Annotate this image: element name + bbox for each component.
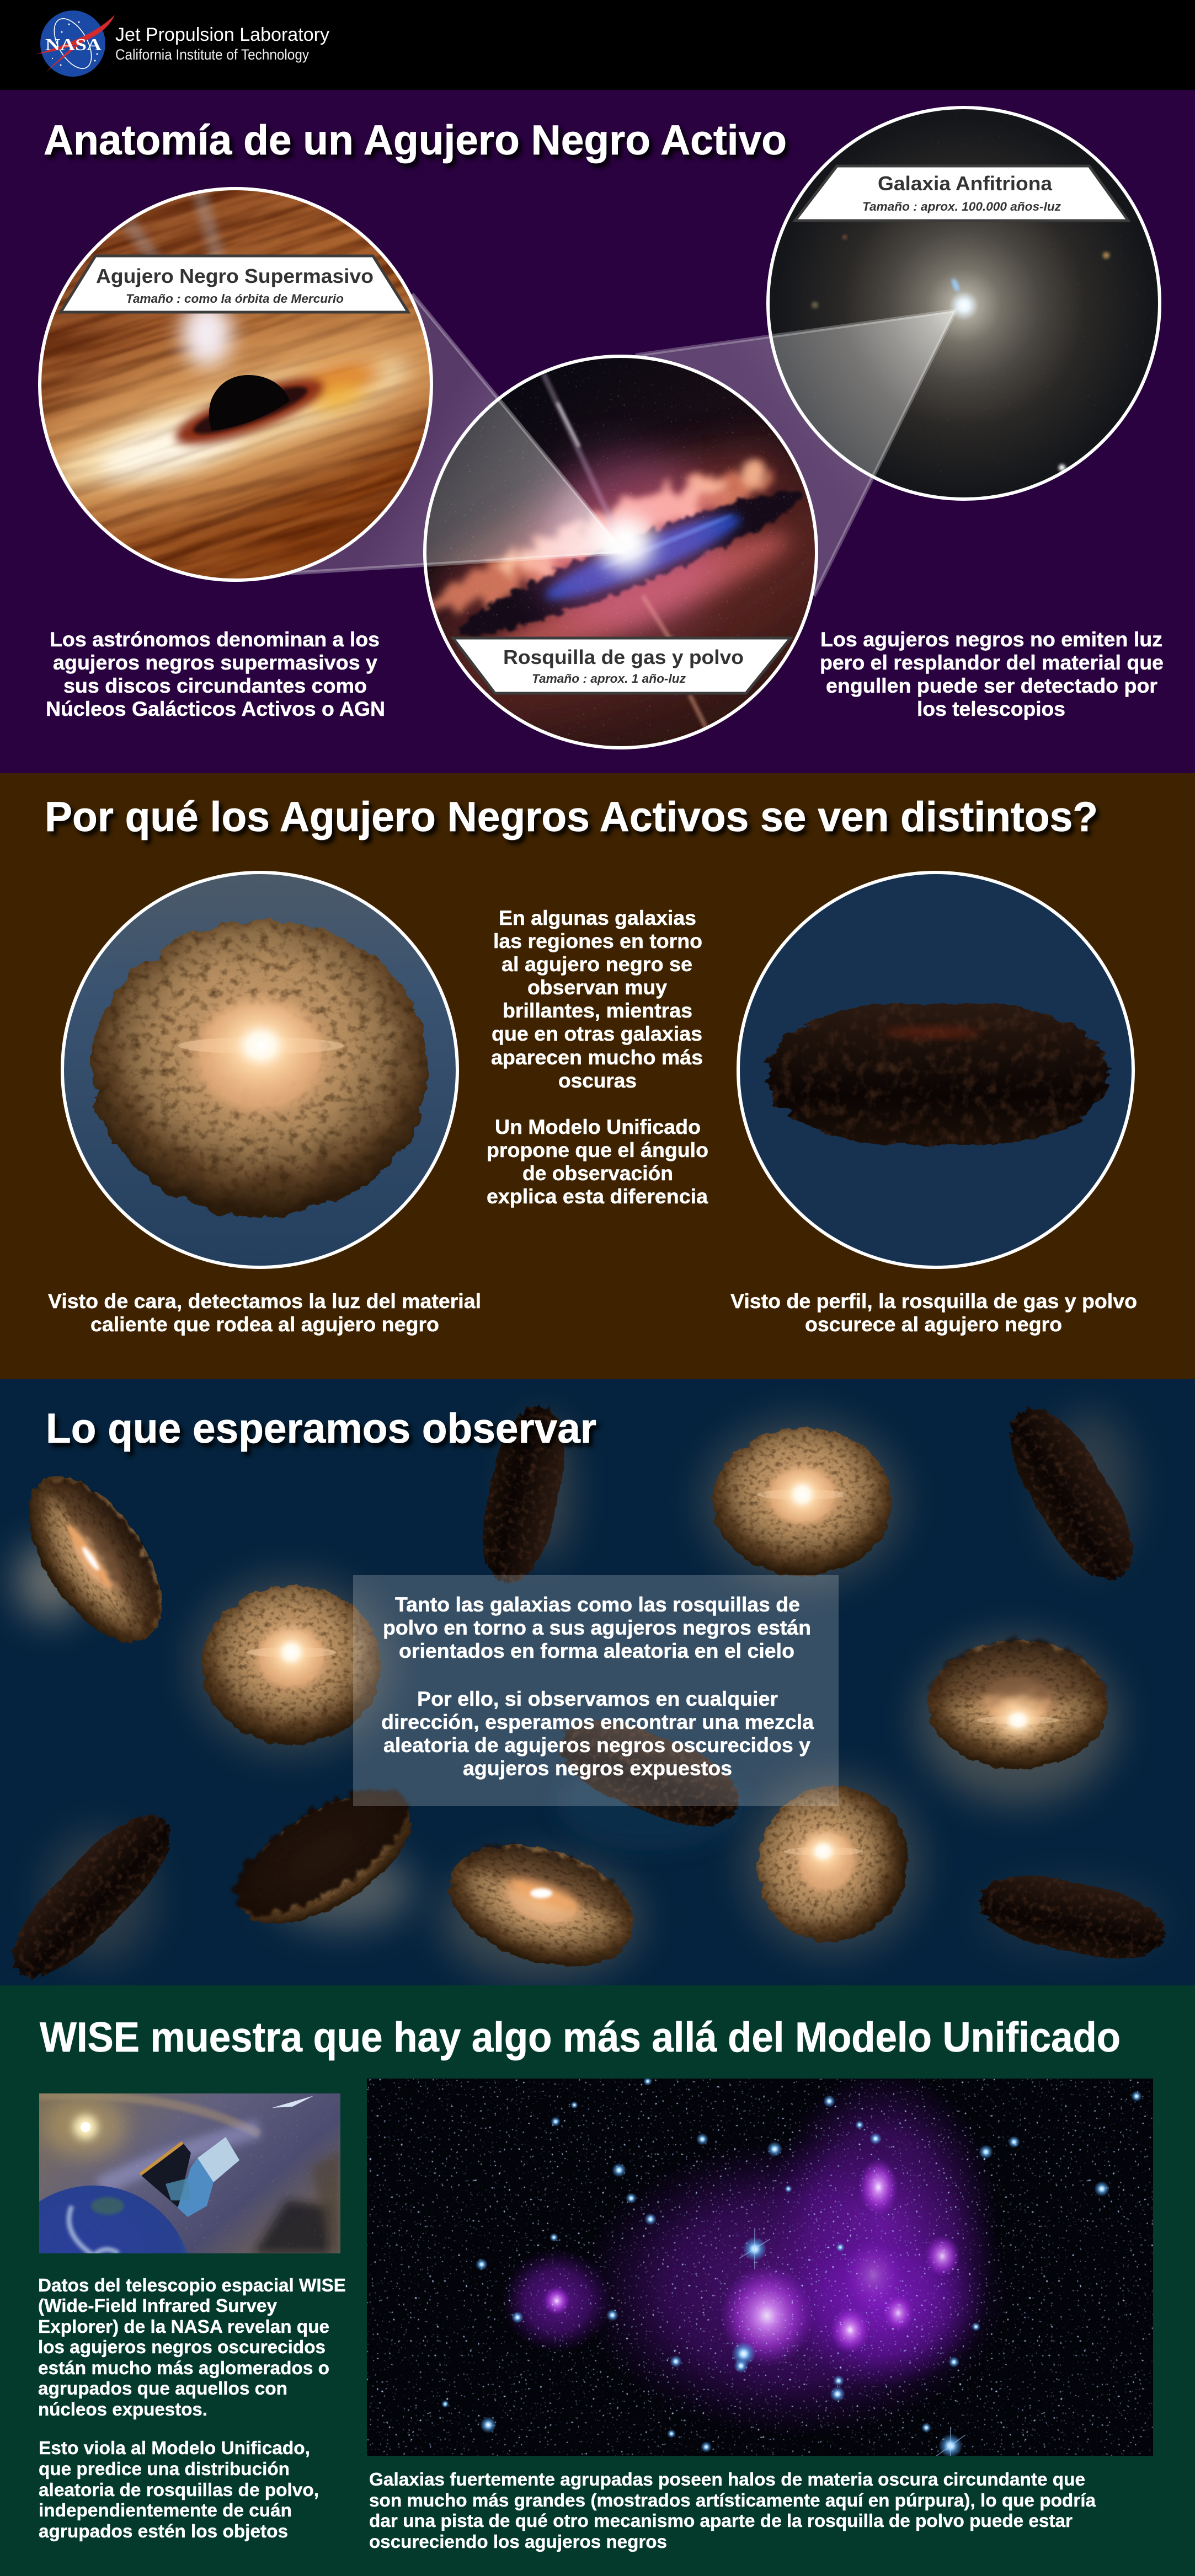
- label: dust donut: Tamaño : aprox. 1 año-luz: [532, 672, 686, 685]
- arrow: zoom cone from dust donut to black hole: [236, 294, 625, 574]
- callout: random orientation: Por ello, si observamos en cualquier: [417, 1688, 778, 1710]
- panel: header: [0, 0, 1195, 90]
- text block: WISE data: los agujeros negros oscurecidos: [38, 2337, 326, 2357]
- callout: random orientation: orientados en forma aleatoria en el cielo: [399, 1640, 794, 1662]
- callout: random orientation: Tanto las galaxias como las rosquillas de: [395, 1593, 800, 1616]
- text block: unified model: al agujero negro se: [502, 953, 692, 976]
- heading: WISE: WISE muestra que hay algo más allá del Modelo Unificado: [40, 2014, 1121, 2061]
- panel: WISE shows something beyond the unified model: [0, 1985, 1195, 2576]
- bright blue stars: [441, 2077, 1142, 2458]
- label: supermassive black hole: Tamaño : como la órbita de Mercurio: [126, 292, 344, 306]
- callout: random orientation: aleatoria de agujeros negros oscurecidos y: [383, 1734, 810, 1756]
- halos: dark matter in purple: [502, 2068, 1010, 2438]
- donut: dark with bright lower rim, bottom left centre: [215, 1765, 434, 1951]
- text block: WISE data: Explorer) de la NASA revelan que: [38, 2316, 329, 2337]
- text block: unified model: propone que el ángulo: [487, 1139, 708, 1161]
- label: host galaxy: Tamaño : aprox. 100.000 años-luz: [862, 200, 1061, 213]
- arrow: zoom cone from host galaxy to dust donut: [621, 310, 956, 596]
- image: galaxy cluster starfield: [367, 2068, 1153, 2458]
- text block: unified model: aparecen mucho más: [491, 1046, 703, 1069]
- panel: anatomy of an active black hole: [0, 32, 1195, 787]
- callout: random orientation: agujeros negros expuestos: [463, 1757, 732, 1780]
- text block: WISE data: agrupados estén los objetos: [39, 2521, 288, 2541]
- donut: face-on, top centre right: [703, 1419, 901, 1584]
- label: host galaxy: Galaxia Anfitriona: [878, 172, 1053, 195]
- caption: edge-on view: Visto de perfil, la rosquilla de gas y polvo: [730, 1290, 1137, 1313]
- image circle: host galaxy: [767, 105, 1161, 502]
- label: supermassive black hole: Agujero Negro Supermasivo: [96, 265, 374, 287]
- donut: tilted with slit, top left: [2, 1454, 188, 1664]
- donut: dark edge-on, bottom right: [974, 1864, 1171, 1970]
- text block: AGN definition: [46, 628, 385, 720]
- text block: black holes emit no light: pero el resplandor del material que: [820, 651, 1164, 674]
- text block: AGN definition: Los astrónomos denominan a los: [50, 628, 380, 651]
- text block: unified model: Un Modelo Unificado: [495, 1116, 701, 1138]
- heading: why different: Por qué los Agujero Negros Activos se ven distintos?: [45, 794, 1098, 840]
- text block: unified model: de observación: [522, 1162, 673, 1185]
- callout: random orientation: [353, 1575, 839, 1806]
- label: dust donut: Rosquilla de gas y polvo: [503, 646, 744, 668]
- donut: dark edge-on, bottom left: [0, 1797, 189, 1995]
- donut: face-on, right middle: [919, 1638, 1117, 1803]
- text block: unified model: brillantes, mientras: [503, 999, 692, 1022]
- panel: what we expect to observe: [0, 1379, 1195, 1995]
- image circle: face-on donut: [62, 872, 457, 1267]
- text block: AGN definition: Núcleos Galácticos Activos o AGN: [46, 698, 385, 720]
- text block: WISE data: Esto viola al Modelo Unificado,: [39, 2438, 310, 2458]
- text block: WISE data: núcleos expuestos.: [38, 2399, 207, 2419]
- donut: tilted, bottom centre: [434, 1823, 649, 1988]
- text block: unified model: oscuras: [558, 1069, 637, 1092]
- text block: black holes emit no light: los telescopios: [917, 698, 1065, 720]
- label: supermassive black hole: [61, 256, 408, 312]
- text block: WISE data: agrupados que aquellos con: [38, 2378, 287, 2398]
- text block: unified model: las regiones en torno: [493, 930, 702, 952]
- caption: dark matter halos: Galaxias fuertemente agrupadas poseen halos de materia oscura circundante que: [369, 2469, 1085, 2489]
- image: WISE telescope: [0, 2093, 340, 2384]
- donut: dark edge-on, top right: [991, 1393, 1152, 1595]
- text block: black holes emit no light: [820, 628, 1164, 720]
- heading: anatomy: Anatomía de un Agujero Negro Activo: [44, 117, 787, 164]
- image circle: supermassive black hole: [38, 187, 433, 582]
- caption: face-on view: Visto de cara, detectamos la luz del material: [48, 1290, 481, 1313]
- text block: unified model: observan muy: [527, 976, 667, 999]
- callout: random orientation: dirección, esperamos encontrar una mezcla: [381, 1711, 814, 1733]
- caption: edge-on view: [730, 1290, 1137, 1336]
- text: California Institute of Technology: California Institute of Technology: [115, 46, 309, 63]
- icon: NASA logo: NASA: [45, 35, 102, 54]
- text block: black holes emit no light: engullen puede ser detectado por: [826, 674, 1157, 697]
- text block: WISE data: Datos del telescopio espacial WISE: [38, 2275, 346, 2295]
- panel: why active black holes look different: [0, 773, 1195, 1379]
- caption: dark matter halos: [369, 2469, 1096, 2552]
- caption: face-on view: [48, 1290, 481, 1336]
- text block: WISE data: que predice una distribución: [39, 2459, 290, 2479]
- caption: dark matter halos: dar una pista de qué otro mecanismo aparte de la rosquilla de polvo puede estar: [369, 2510, 1073, 2531]
- text block: AGN definition: agujeros negros supermasivos y: [53, 651, 377, 674]
- donut: face-on, left middle: [192, 1577, 391, 1753]
- donut: dark, under centre panel: [549, 1703, 751, 1850]
- icon: NASA logo: [36, 10, 115, 77]
- caption: edge-on view: oscurece al agujero negro: [805, 1313, 1062, 1336]
- text block: unified model: que en otras galaxias: [492, 1022, 702, 1045]
- callout: random orientation: polvo en torno a sus agujeros negros están: [383, 1616, 811, 1639]
- text block: unified model: [487, 907, 708, 1208]
- text block: AGN definition: sus discos circundantes como: [63, 674, 367, 697]
- heading: what we expect: Lo que esperamos observar: [46, 1405, 596, 1452]
- caption: dark matter halos: son mucho más grandes (mostrados artísticamente aquí en púrpura), lo que podría: [369, 2490, 1096, 2510]
- caption: face-on view: caliente que rodea al agujero negro: [90, 1313, 439, 1336]
- text block: unified model: explica esta diferencia: [487, 1185, 708, 1208]
- donut: tilted, bottom right of centre: [732, 1761, 933, 1967]
- text block: WISE data: (Wide-Field Infrared Survey: [38, 2295, 278, 2316]
- image circle: gas and dust donut: [423, 355, 818, 749]
- text block: WISE data: independientemente de cuán: [39, 2500, 292, 2520]
- label: dust donut: [453, 638, 791, 693]
- label: host galaxy: [795, 166, 1128, 221]
- text block: WISE data: [38, 2275, 346, 2541]
- text: Jet Propulsion Laboratory: Jet Propulsion Laboratory: [115, 24, 329, 45]
- caption: dark matter halos: oscureciendo los agujeros negros: [369, 2531, 667, 2552]
- image circle: edge-on donut: [738, 872, 1133, 1267]
- text block: WISE data: están mucho más aglomerados o: [38, 2358, 329, 2378]
- text block: black holes emit no light: Los agujeros negros no emiten luz: [820, 628, 1162, 651]
- text block: WISE data: aleatoria de rosquillas de polvo,: [39, 2479, 319, 2500]
- donut: dark edge-on, top centre: [472, 1400, 575, 1589]
- text block: unified model: En algunas galaxias: [499, 907, 696, 929]
